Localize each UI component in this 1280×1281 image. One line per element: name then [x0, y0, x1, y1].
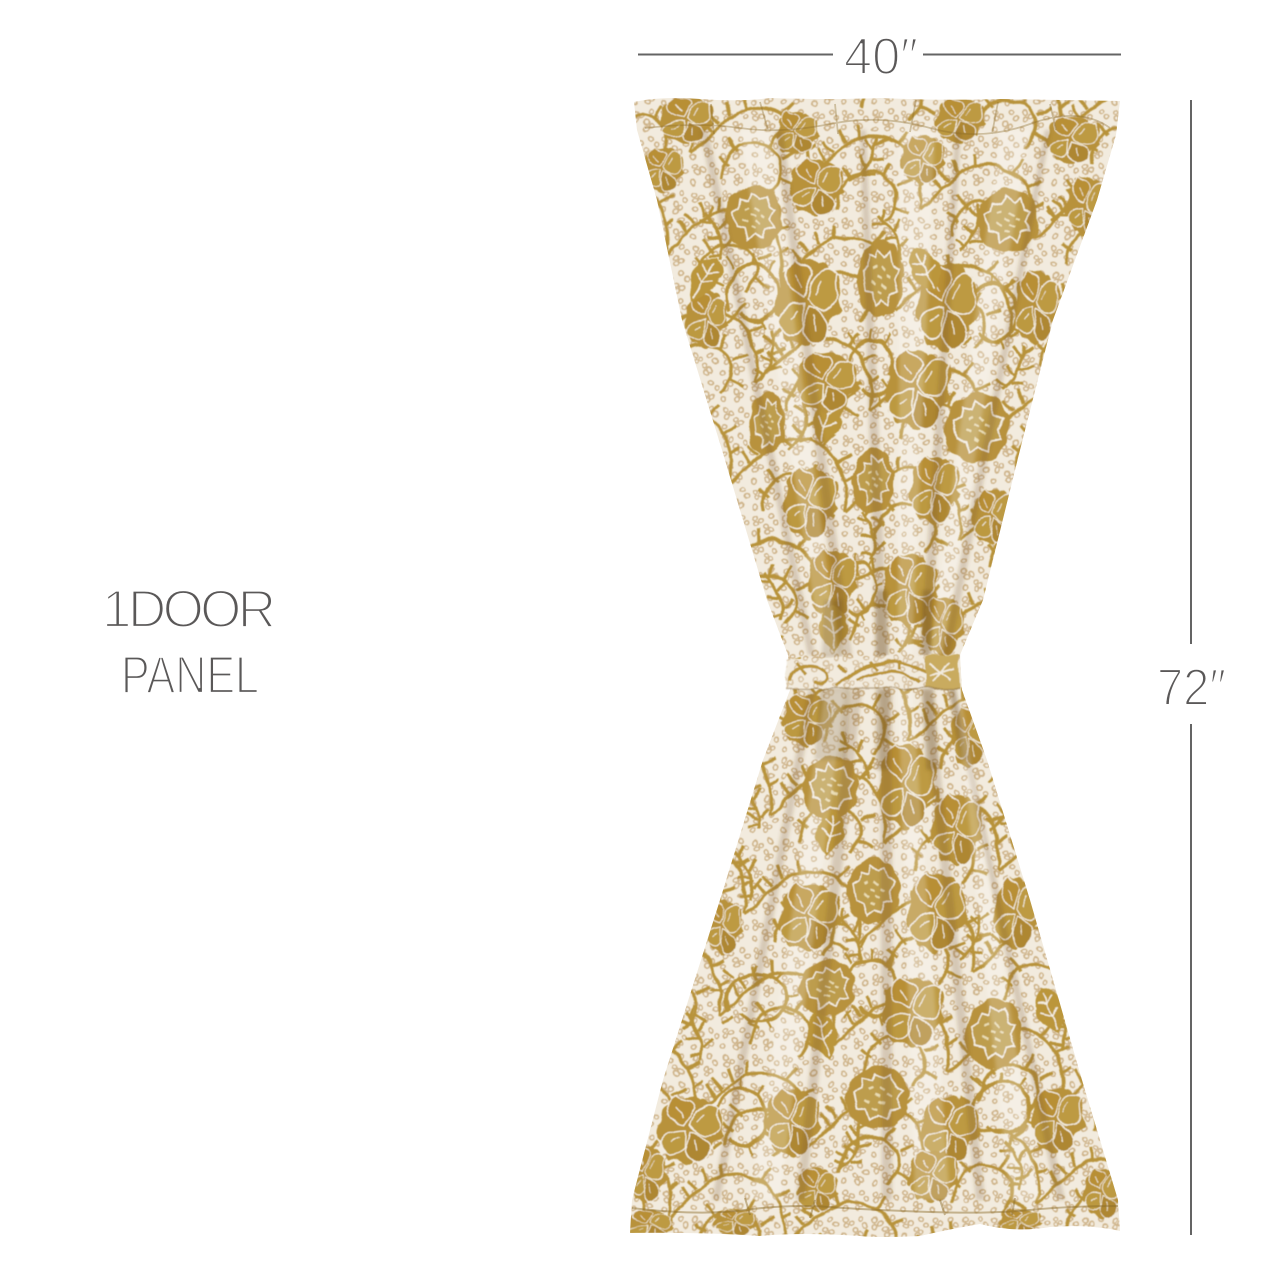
- panel caption: [102, 580, 276, 705]
- tie-back band: [786, 655, 960, 689]
- caption line one: DOOR: [128, 580, 276, 639]
- pleat shadows: [700, 130, 1065, 1200]
- caption line one: 1: [102, 580, 131, 639]
- floral print: [620, 90, 1130, 1245]
- pleat highlights: [740, 130, 1040, 1200]
- height label: 72″: [1157, 659, 1226, 717]
- caption line two: PANEL: [121, 646, 259, 705]
- width label: 40″: [844, 28, 918, 86]
- waist fold shadows: [815, 590, 968, 770]
- curtain panel: [620, 90, 1130, 1245]
- top rod pocket gathers: [645, 100, 1110, 134]
- bottom hem gathers: [632, 1198, 1118, 1218]
